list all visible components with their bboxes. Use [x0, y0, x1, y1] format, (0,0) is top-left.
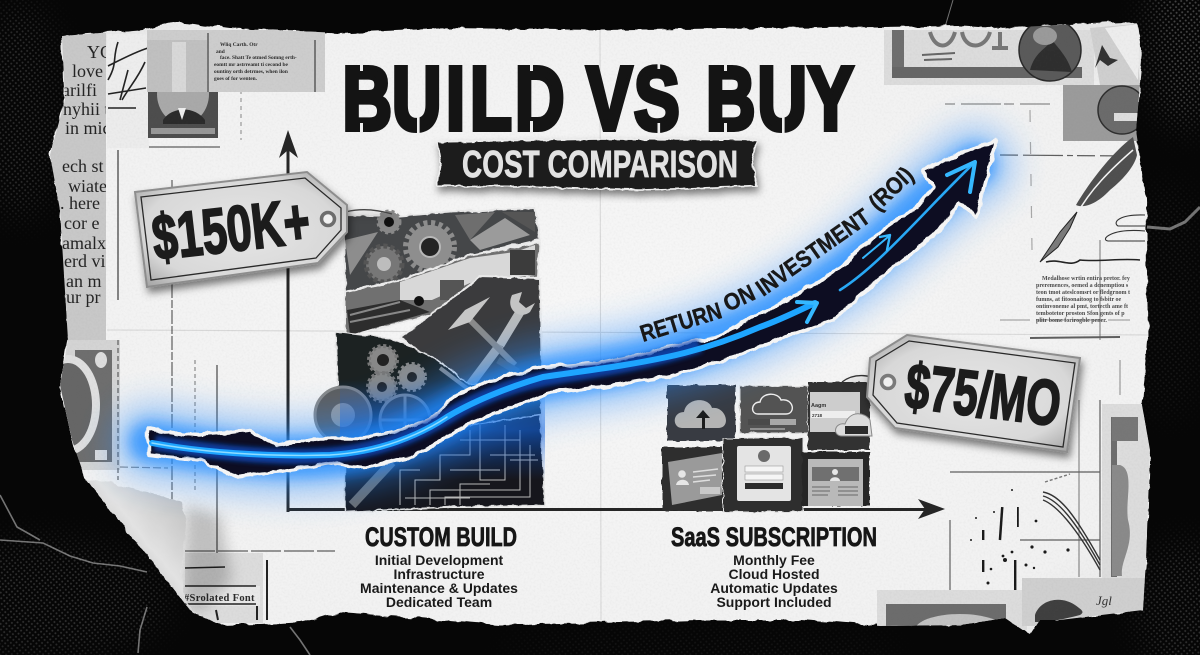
custom build column label: CUSTOM BUILD: [365, 522, 517, 552]
top newspaper clipping: and: [216, 49, 225, 55]
tile: login window with cloud: Aagm: [811, 403, 826, 409]
saas column label: Monthly Fee: [733, 552, 815, 568]
subtitle banner: [437, 139, 757, 190]
title: BUILDVSBUY: [343, 48, 853, 149]
price tag: saas: [842, 335, 1080, 452]
y axis with arrowhead: [279, 130, 298, 512]
tile: cloud storage: [740, 386, 808, 433]
saas column label: SaaS SUBSCRIPTION: [671, 522, 877, 552]
left newspaper strip: cor e: [64, 213, 99, 233]
paper grain: [580, 58, 1038, 570]
scrap: workshop photo: [345, 243, 540, 337]
scrap: gears top: [343, 208, 540, 292]
left newspaper strip: in mic: [65, 118, 111, 138]
left newspaper strip: wiate: [68, 176, 107, 196]
price tag: saas: $75/MO: [901, 349, 1065, 440]
tile: browser window: [802, 452, 870, 506]
custom build column label: Dedicated Team: [386, 594, 492, 610]
top newspaper clipping: Wliq Carth. Otr: [220, 42, 258, 48]
saas column label: Cloud Hosted: [728, 566, 820, 582]
top newspaper clipping: ountiny orth detrmes, when ilon: [214, 69, 288, 75]
top-right postage stamp: [1063, 85, 1148, 141]
tile: login window with cloud: [808, 382, 872, 450]
left newspaper strip: arilfi: [62, 80, 97, 100]
left newspaper strip: ur pr: [66, 287, 100, 307]
ROI rising arrow: [148, 140, 996, 477]
torn dark gash with paper edge: [148, 140, 996, 477]
top-left stamp: [148, 92, 218, 138]
neon line: [152, 162, 975, 455]
top-right banknote: [884, 19, 1094, 85]
curled paper corner, bottom left: [85, 478, 192, 612]
saas subscription collage: [662, 382, 872, 512]
left newspaper strip: an m: [66, 271, 102, 291]
left newspaper strip: ech st: [62, 156, 103, 176]
left newspaper strip: nyhii t: [63, 99, 110, 119]
ROI label: (ROI): [864, 162, 918, 216]
feather tip lower right: [1043, 474, 1100, 570]
right small paragraph: ontinvoneme al pmt, tortecth ame ft: [1036, 304, 1128, 310]
top-right fold corner: [1090, 24, 1140, 85]
fold creases and grid lines: [107, 30, 1148, 620]
ROI label: INVESTMENT: [751, 203, 875, 301]
tile: login form: [723, 438, 803, 512]
custom build column label: Infrastructure: [393, 566, 485, 582]
tile: profile card: [662, 447, 724, 511]
saas column label: [671, 522, 877, 610]
folded corner shadow: [183, 505, 232, 612]
ROI label: RETURN: [637, 297, 725, 347]
top newspaper clipping: face. Shatt Te otmed Somng erth-: [220, 55, 297, 61]
top newspaper clipping: [147, 30, 325, 92]
right small paragraph: fumns, at fitoonaitoog to fsbitr oe: [1036, 297, 1122, 303]
left banknote: [36, 340, 120, 480]
right small paragraph: teon tmot ateslcomsrt or fledgrnom t: [1036, 290, 1130, 296]
scrap: machinery gears: [315, 332, 542, 450]
top newspaper clipping: eomtt mr astrreamt ti cecond be: [214, 62, 289, 68]
price tag: custom build: $150K+: [148, 184, 314, 274]
custom build column label: Initial Development: [375, 552, 504, 568]
scrap: hammer and wrench: [400, 276, 542, 400]
tag cord: [330, 210, 392, 218]
left newspaper strip: . here: [60, 193, 100, 213]
bottom-right banknote and clipping: [877, 578, 1145, 630]
left newspaper strip: love: [72, 61, 103, 81]
x axis with arrowhead: [288, 499, 945, 519]
blue tint over collage: [340, 380, 545, 480]
bottom-left clipping: [182, 553, 267, 623]
saas column label: Support Included: [716, 594, 832, 610]
tag cord: [842, 376, 888, 382]
right small paragraph: plitr bome forirogble pener.: [1036, 318, 1107, 324]
custom build column label: [360, 522, 518, 610]
chart axes: [279, 130, 298, 512]
scrap: circuit blueprint: [345, 415, 545, 512]
bottom-left clipping: #Srolated Font: [184, 593, 255, 604]
inner blue haze: [155, 345, 700, 456]
bottom-right banknote and clipping: Jgl: [1096, 593, 1112, 608]
subtitle banner: COST COMPARISON: [462, 144, 738, 186]
ROI label: ON: [719, 279, 759, 317]
left newspaper strip: erd vi: [64, 251, 105, 271]
top newspaper clipping: goes of for wenten.: [214, 76, 258, 82]
blue glow: [150, 165, 975, 457]
right small paragraph: [1036, 276, 1130, 324]
feather quill and signature: [1040, 137, 1145, 263]
left newspaper strip: amalx: [62, 233, 106, 253]
right small paragraph: preremences, oemed a dcnemptiou s: [1036, 283, 1129, 289]
tile: cloud upload: [667, 385, 735, 441]
custom build collage: [315, 208, 545, 512]
right small paragraph: tembotetor proston Sfon gents of p: [1036, 311, 1125, 317]
left newspaper strip: YC: [87, 42, 112, 62]
left newspaper strip: [50, 33, 112, 353]
custom build column label: Maintenance & Updates: [360, 580, 518, 596]
ROI label: [637, 162, 918, 347]
tile: login window with cloud: 2718: [812, 413, 823, 418]
saas column label: Automatic Updates: [710, 580, 838, 596]
right banknote strip: [1102, 404, 1152, 578]
top-left handwritten note: [107, 34, 149, 148]
right small paragraph: Medalhose wrtin entira pretor. fey: [1042, 276, 1130, 282]
ink splatter: [970, 489, 1070, 590]
